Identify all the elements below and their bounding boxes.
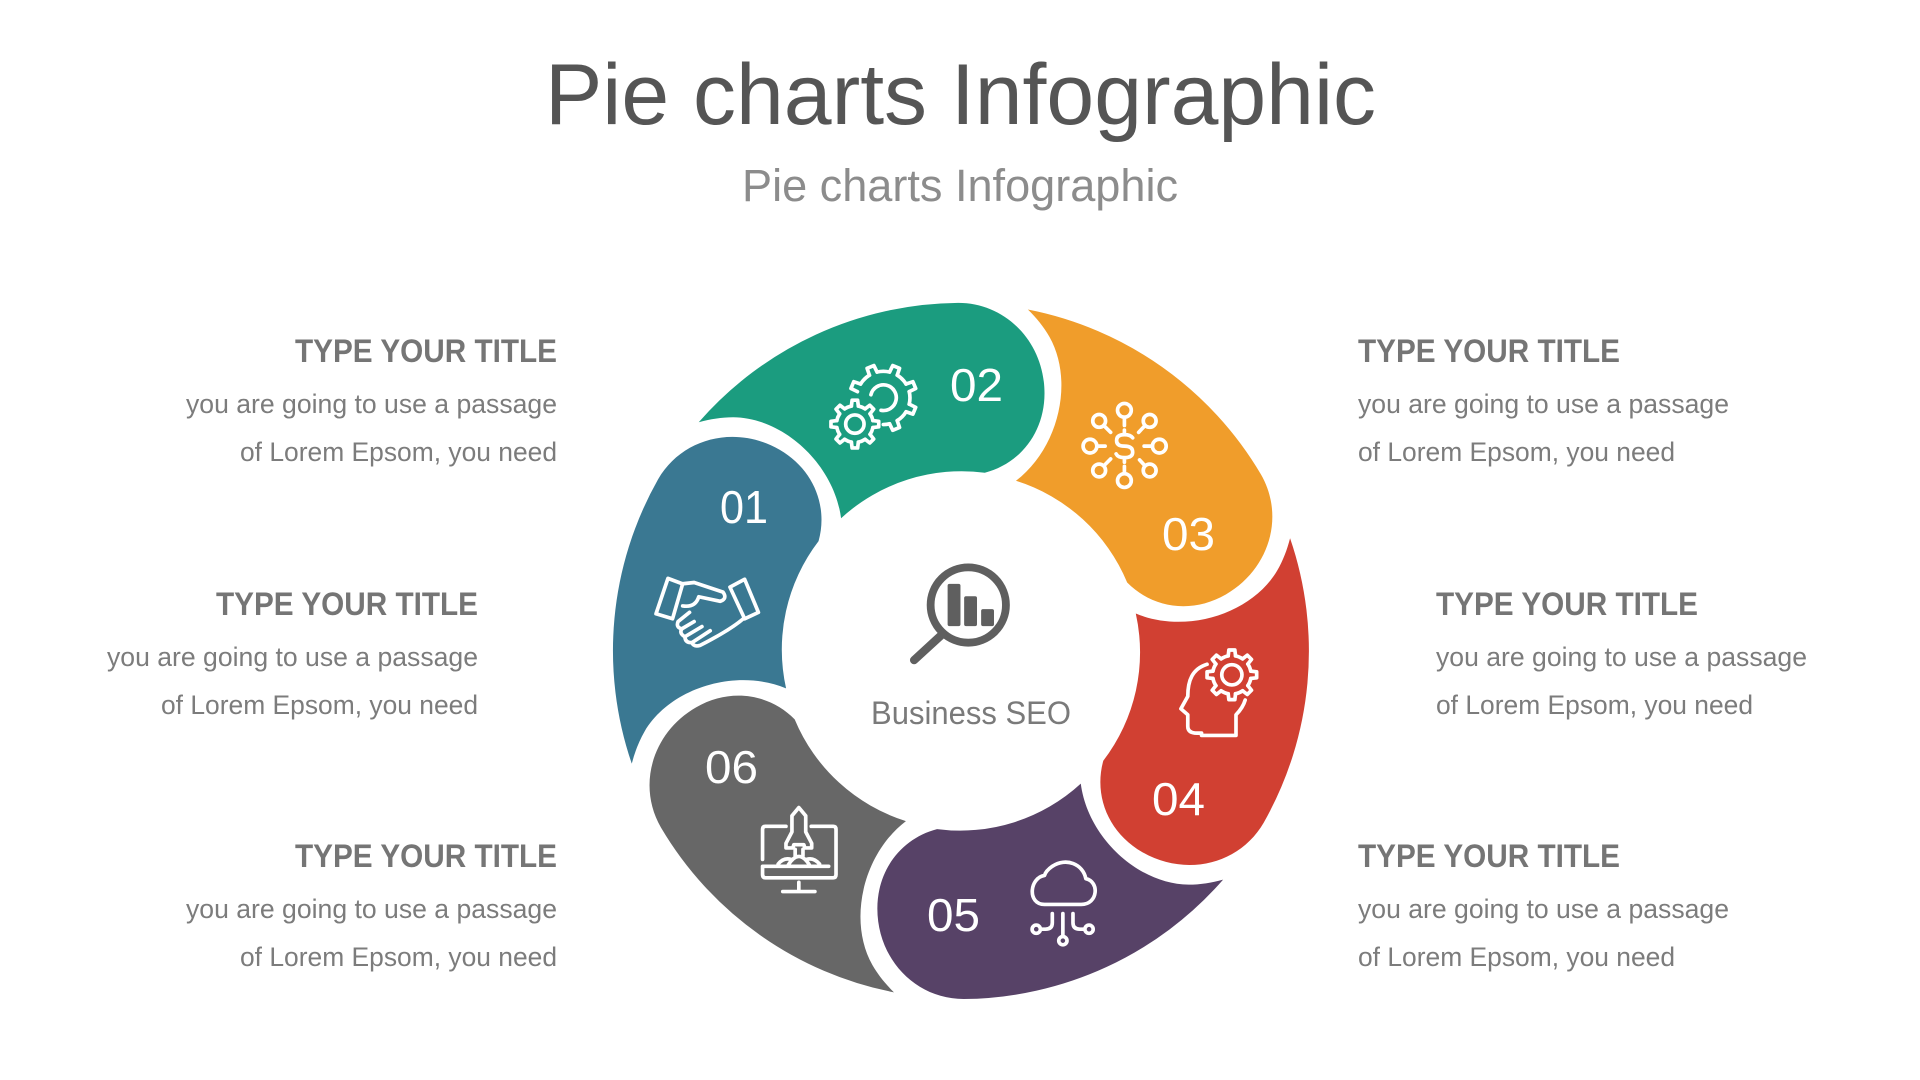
title: Pie charts Infographic [545,47,1376,143]
text block: middle left [107,586,478,720]
ring chart [528,250,1393,1052]
text block: middle right [1436,586,1807,720]
text block: top left [186,333,557,467]
text block: top right [1358,333,1729,467]
segment 02 [699,303,1045,518]
text block: bottom left: TYPE YOUR TITLE [295,838,557,874]
text block: middle left: TYPE YOUR TITLE [216,586,478,622]
text block: bottom right: of Lorem Epsom, you need [1358,942,1675,972]
icon: gears [831,365,916,448]
icon: head with gear [1181,650,1257,735]
text block: top left: you are going to use a passage [186,389,557,419]
segment 03 [945,250,1304,657]
number 01: 01 [720,481,768,533]
icon: handshake [656,578,758,646]
text block: top left: of Lorem Epsom, you need [240,437,557,467]
segment 01 [528,405,888,812]
segment 05 [877,784,1223,999]
text block: bottom right: TYPE YOUR TITLE [1358,838,1620,874]
text block: top right: of Lorem Epsom, you need [1358,437,1675,467]
subtitle: Pie charts Infographic [742,160,1178,211]
text block: top left: TYPE YOUR TITLE [295,333,557,369]
center label: Business SEO [871,695,1071,731]
text block: bottom left: of Lorem Epsom, you need [240,942,557,972]
text block: top right: you are going to use a passage [1358,389,1729,419]
text block: bottom left [186,838,557,972]
icon: magnifier with bars [914,567,1006,660]
text block: middle right: TYPE YOUR TITLE [1436,586,1698,622]
text block: middle right: you are going to use a passage [1436,642,1807,672]
icon: money network [1083,403,1166,487]
text block: middle left: of Lorem Epsom, you need [161,690,478,720]
segment 04 [1034,490,1393,897]
number 06: 06 [705,741,758,793]
text block: bottom right [1358,838,1729,972]
text block: bottom right: you are going to use a passage [1358,894,1729,924]
icon: cloud network [1032,862,1095,945]
number 03: 03 [1162,508,1215,560]
text block: middle right: of Lorem Epsom, you need [1436,690,1753,720]
text block: bottom left: you are going to use a passage [186,894,557,924]
segment 06 [618,645,977,1052]
text block: middle left: you are going to use a passage [107,642,478,672]
text block: top right: TYPE YOUR TITLE [1358,333,1620,369]
number 04: 04 [1152,773,1205,825]
number 05: 05 [927,889,980,941]
number 02: 02 [950,359,1003,411]
icon: rocket on monitor [763,808,836,892]
